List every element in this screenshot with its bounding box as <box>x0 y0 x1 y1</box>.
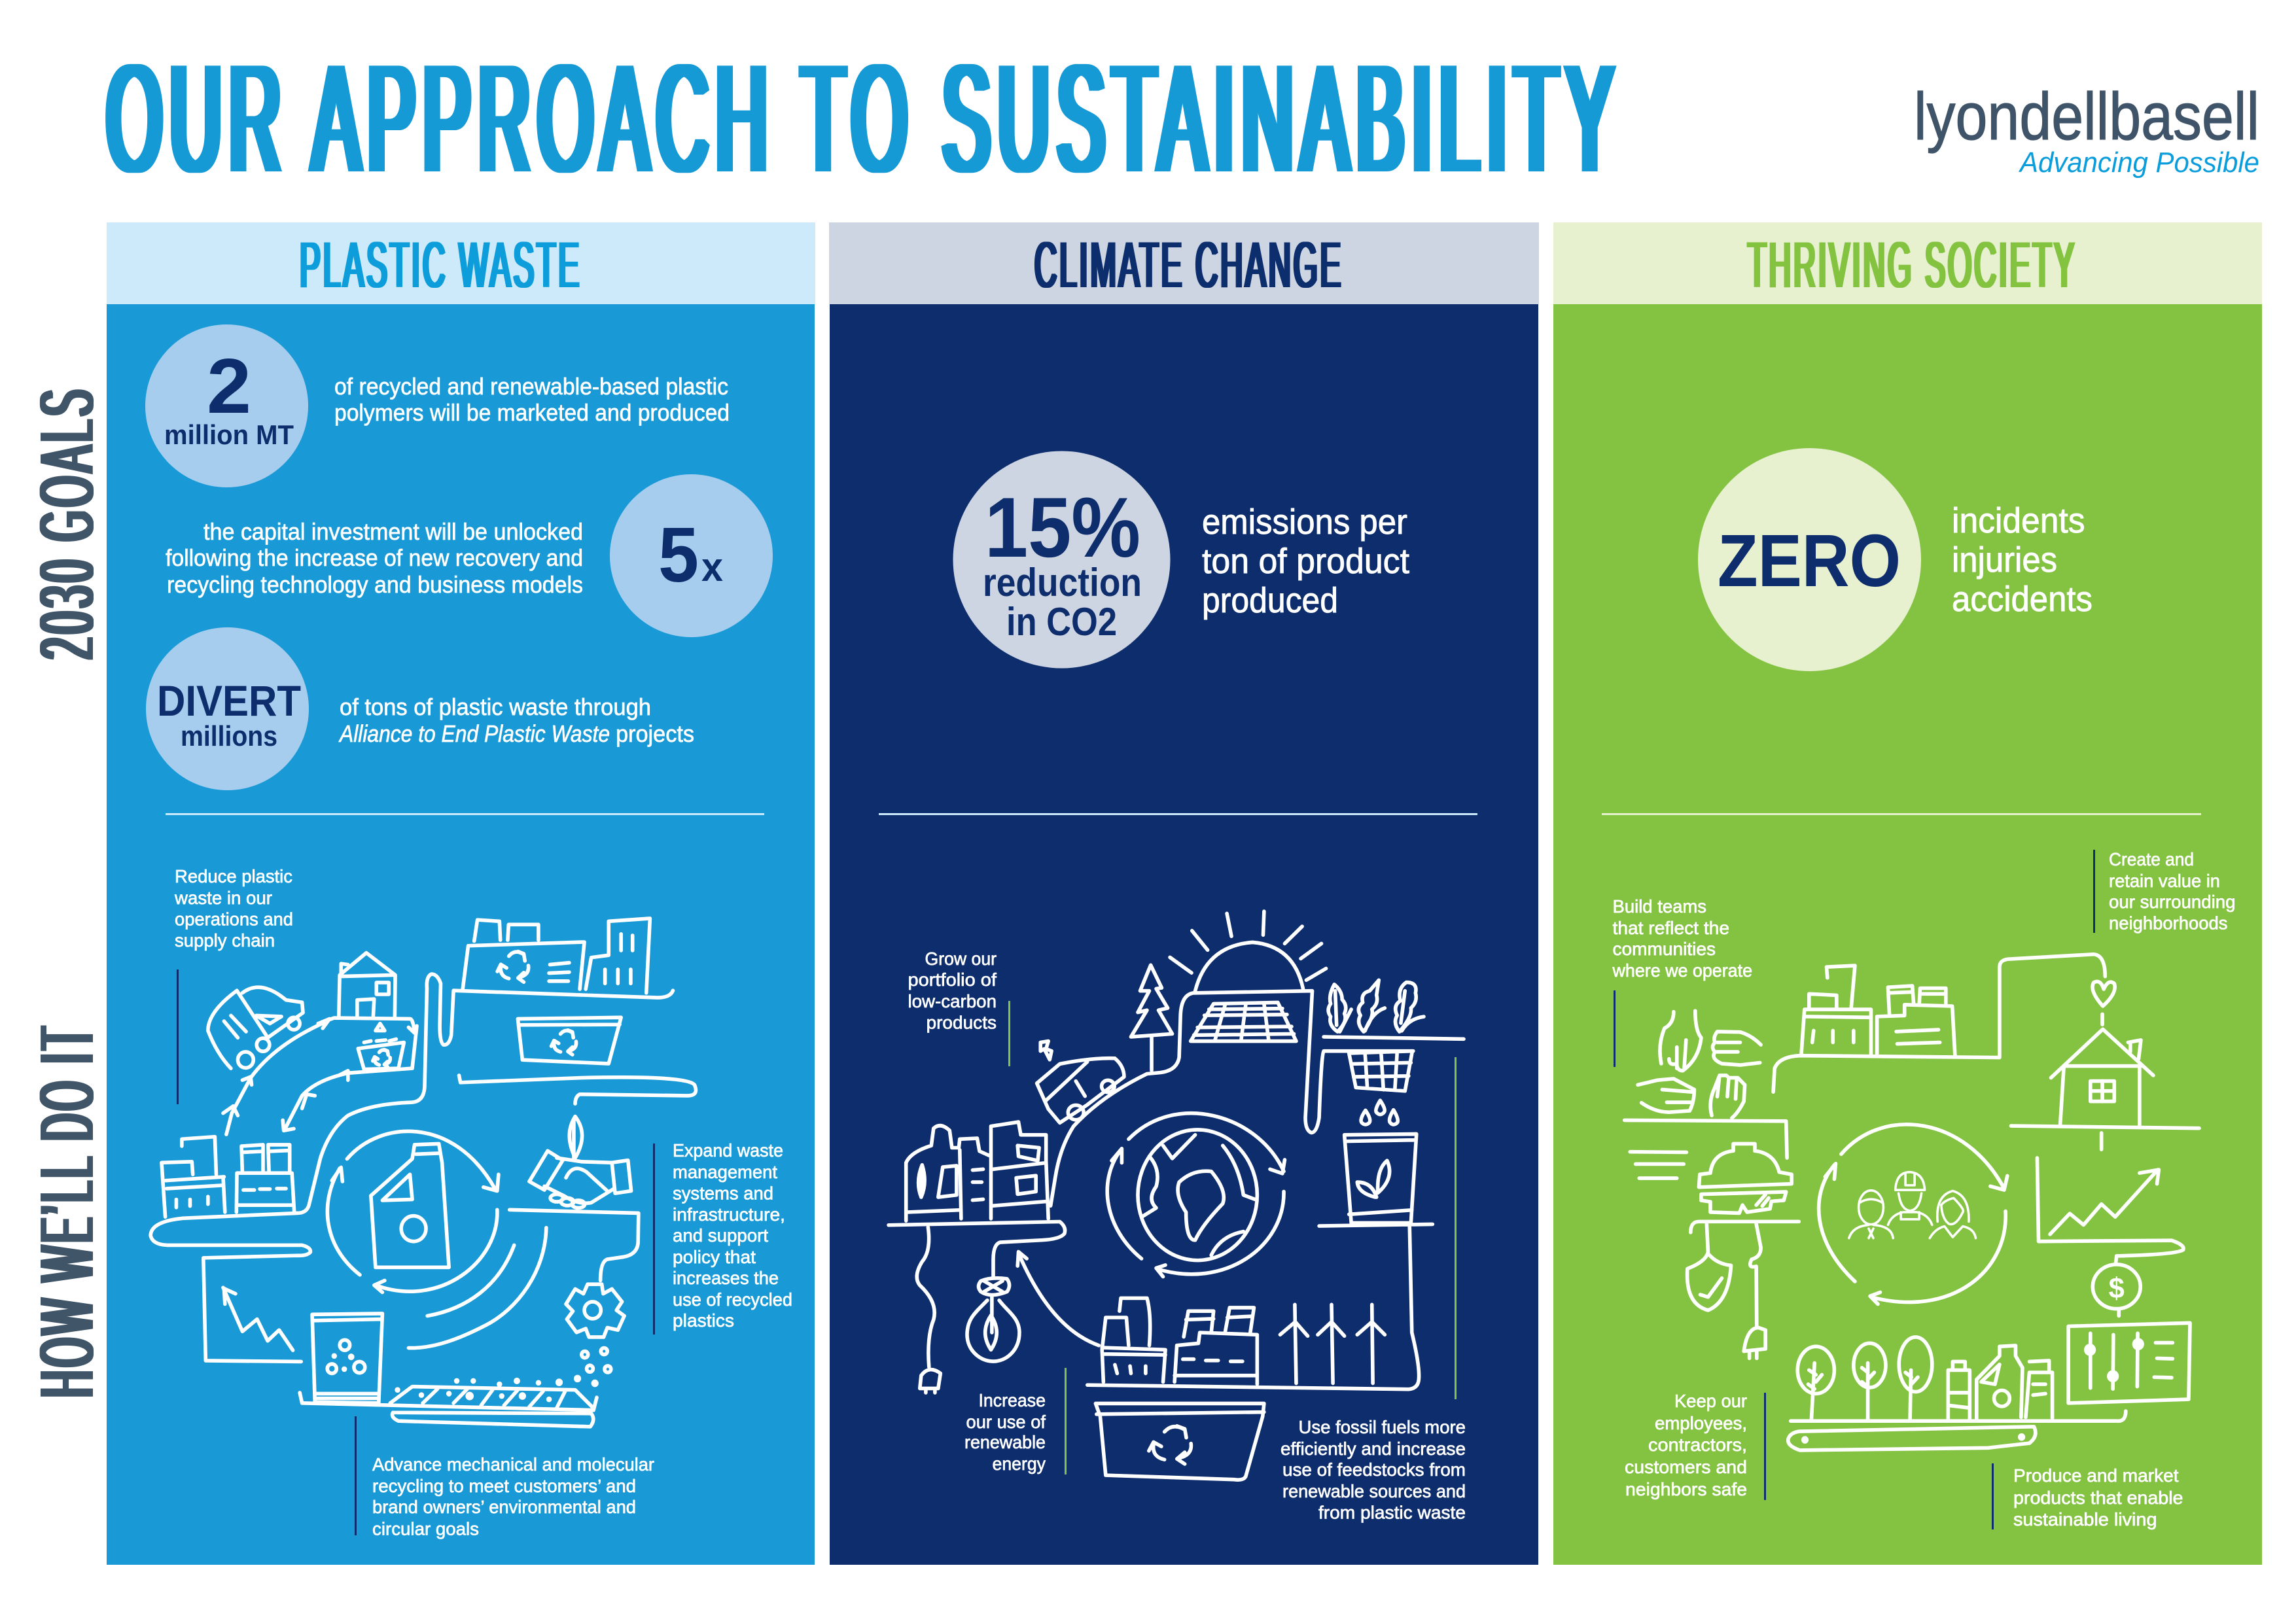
text: build teams <box>1612 896 1752 1067</box>
text: fossil fuels and feedstocks: Use fossil fuels more <box>1298 1417 1466 1437</box>
text: grow low-carbon products: Grow our <box>925 949 997 969</box>
icon: dollar coin: $ <box>2109 1272 2125 1304</box>
icon: left factory <box>162 1137 225 1217</box>
arrow: factory to products <box>1017 1251 1099 1346</box>
goal: 2 million MT: million MT <box>164 419 294 450</box>
text: expand waste management: Expand waste <box>673 1140 783 1161</box>
icon: recycling building <box>463 920 584 989</box>
logo: lyondellbasell <box>1914 79 2259 179</box>
text: expand waste management: plastics <box>673 1310 734 1331</box>
text: renewable energy <box>964 1368 1067 1475</box>
text: HOW WE’LL DO IT <box>24 1023 109 1397</box>
goal: 2 million MT <box>145 324 730 487</box>
panel body: thriving society <box>1553 304 2262 1565</box>
icon: small recycling bin <box>358 1024 404 1070</box>
goal: 15% reduction: 15% <box>985 480 1140 575</box>
goal: 5x capital investment: 5 <box>658 512 699 599</box>
panel header: thriving society <box>1553 222 2262 304</box>
goal: divert millions <box>146 627 694 790</box>
goal: 2 million MT: 2 <box>207 343 251 430</box>
text: produce and market: Produce and market <box>2013 1465 2179 1486</box>
goal: divert millions: DIVERT <box>157 676 301 725</box>
path: main loop <box>1051 991 1464 1206</box>
goal: divert millions: projects <box>616 720 694 747</box>
icon: basket <box>1349 1051 1412 1091</box>
icon: second factory <box>1174 1308 1257 1384</box>
text: grow low-carbon products: products <box>927 1013 997 1032</box>
text: build teams: Build teams <box>1612 896 1706 916</box>
panel: climate change <box>829 222 1539 1565</box>
text: reduce plastic waste <box>174 866 293 1104</box>
panel header: climate change: CLIMATE CHANGE <box>1034 228 1343 301</box>
goal: 15% reduction: produced <box>1202 581 1338 620</box>
icon: cycle arrows <box>1107 1113 1284 1277</box>
path: house shelf <box>2011 1126 2199 1149</box>
text: keep people safe: neighbors safe <box>1625 1479 1747 1499</box>
goal: zero incidents: accidents <box>1952 580 2093 619</box>
text: renewable energy: Increase <box>979 1390 1046 1410</box>
goal: 5x capital investment: the capital investment will be unlocked <box>203 518 583 545</box>
path: handshake shelf <box>510 1210 639 1280</box>
goal: zero incidents <box>1698 448 2093 671</box>
goal: 5x capital investment: x <box>701 545 723 590</box>
icon: plastic products <box>906 1122 1048 1221</box>
text: keep people safe <box>1625 1391 1766 1500</box>
icon: rising chart <box>2037 1158 2183 1264</box>
text: advance recycling: brand owners’ environmental and <box>372 1497 636 1517</box>
text: expand waste management: management <box>673 1162 777 1182</box>
panel body: climate change <box>830 304 1538 1565</box>
text: expand waste management: policy that <box>673 1247 756 1267</box>
icon: water drops <box>1361 1100 1398 1125</box>
text: reduce plastic waste: supply chain <box>175 930 275 951</box>
icon: power plug <box>917 1227 940 1393</box>
text: expand waste management: systems and <box>673 1183 773 1204</box>
text: fossil fuels and feedstocks: from plastic waste <box>1318 1502 1466 1523</box>
icon: plastic bottle <box>371 1143 449 1267</box>
goal: zero incidents: injuries <box>1952 540 2057 580</box>
text: renewable energy: our use of <box>966 1412 1046 1432</box>
text: advance recycling: circular goals <box>372 1519 479 1539</box>
goal: zero incidents: incidents <box>1952 501 2085 540</box>
text: grow low-carbon products <box>908 949 1010 1066</box>
icon: declining chart <box>223 1287 293 1350</box>
icon: factory <box>1801 966 1871 1055</box>
illustration: society circular economy <box>1625 954 2199 1450</box>
icon: bottles <box>1948 1346 2053 1420</box>
arrow: supply chain route <box>223 1018 417 1134</box>
icon: garbage truck <box>208 987 303 1068</box>
panel: thriving society <box>1553 222 2262 1565</box>
goal: divert millions: of tons of plastic waste through <box>340 693 651 720</box>
text: create and retain value: retain value in <box>2109 871 2220 891</box>
panel: plastic waste <box>107 222 815 1565</box>
icon: electric car <box>1037 1041 1124 1123</box>
text: fossil fuels and feedstocks: use of feedstocks from <box>1282 1459 1466 1480</box>
illustration: climate circular economy <box>889 911 1464 1480</box>
icon: light bulb <box>967 1278 1019 1361</box>
text: keep people safe: contractors, <box>1648 1435 1747 1455</box>
icon: conveyor belt <box>1788 1411 2126 1450</box>
icon: plug <box>1744 1224 1765 1358</box>
icon: handshake <box>529 1117 631 1208</box>
text: create and retain value <box>2093 849 2235 933</box>
path: hands shelf <box>1625 1120 1787 1178</box>
goal: 15% reduction: in CO2 <box>1006 600 1117 644</box>
icon: pellet bag <box>312 1314 382 1403</box>
icon: hands <box>1638 1011 1761 1118</box>
text: create and retain value: neighborhoods <box>2109 913 2227 933</box>
icon: cycle arrows <box>327 1131 499 1292</box>
path: swooshes <box>408 1228 546 1348</box>
icon: control panel <box>2068 1323 2190 1403</box>
text: keep people safe: employees, <box>1655 1413 1747 1433</box>
icon: trees <box>1797 1337 1932 1421</box>
goal: divert millions: millions <box>181 720 277 752</box>
text: fossil fuels and feedstocks: renewable sources and <box>1282 1481 1466 1501</box>
icon: house <box>2051 1029 2153 1126</box>
icon: solar panel <box>1191 1002 1296 1041</box>
text: produce and market: sustainable living <box>2013 1509 2157 1529</box>
panel header: plastic waste: PLASTIC WASTE <box>300 228 582 301</box>
text: build teams: communities <box>1612 939 1716 959</box>
text: create and retain value: Create and <box>2109 849 2194 869</box>
text: reduce plastic waste: waste in our <box>174 888 272 908</box>
path: right shelf <box>1087 1224 1432 1389</box>
text: reduce plastic waste: operations and <box>175 909 293 929</box>
icon: second factory <box>236 1145 294 1212</box>
goal: 15% reduction: emissions per <box>1202 502 1407 542</box>
text: create and retain value: our surrounding <box>2109 892 2235 912</box>
goal: 2 million MT: of recycled and renewable-based plastic <box>334 373 728 400</box>
icon: tree <box>1131 965 1173 1070</box>
text: fossil fuels and feedstocks <box>1280 1057 1466 1523</box>
icon: dollar coin <box>2093 1265 2140 1316</box>
icon: three people <box>1849 1172 1975 1238</box>
text: grow low-carbon products: low-carbon <box>908 991 997 1011</box>
icon: house <box>339 953 395 1017</box>
text: build teams: that reflect the <box>1612 918 1729 938</box>
goal: 15% reduction: ton of product <box>1202 542 1409 581</box>
text: keep people safe: customers and <box>1625 1457 1747 1477</box>
icon: sun <box>1170 911 1326 991</box>
icon: factory <box>1102 1298 1165 1382</box>
logo: lyondellbasell: Advancing Possible <box>2018 147 2259 179</box>
text: expand waste management: use of recycled <box>673 1289 792 1310</box>
path: main loop <box>150 974 673 1361</box>
goal: 15% reduction <box>953 451 1409 669</box>
icon: second factory <box>1877 986 1955 1055</box>
icon: hard hat and goggles <box>1699 1143 1792 1213</box>
panel header: plastic waste <box>107 222 815 304</box>
text: expand waste management: and support <box>673 1225 768 1246</box>
icon: bio cup <box>1345 1134 1417 1223</box>
icon: large recycling bin <box>1095 1403 1264 1480</box>
text: build teams: where we operate <box>1612 960 1752 981</box>
text: grow low-carbon products: portfolio of <box>908 969 997 990</box>
icon: safety shield <box>1687 1221 1799 1310</box>
icon: plants <box>1328 980 1424 1032</box>
goal: 2 million MT: polymers will be marketed and produced <box>334 399 730 426</box>
path: left shelf <box>889 1221 1065 1277</box>
icon: cycle arrows <box>1819 1125 2007 1304</box>
text: advance recycling: Advance mechanical and molecular <box>372 1454 654 1475</box>
goal: 15% reduction: reduction <box>983 561 1142 604</box>
text: expand waste management <box>653 1140 792 1335</box>
text: keep people safe: Keep our <box>1674 1391 1747 1411</box>
goal: 5x capital investment <box>166 474 773 637</box>
text: renewable energy: renewable <box>964 1432 1046 1452</box>
path: top route <box>1773 954 2105 1092</box>
icon: wind turbines <box>1280 1304 1385 1384</box>
icon: conveyor belt <box>300 1348 611 1427</box>
text: renewable energy: energy <box>992 1454 1046 1474</box>
icon: heart <box>2093 981 2115 1024</box>
text: produce and market: products that enable <box>2013 1488 2183 1508</box>
icon: globe <box>1138 1130 1257 1261</box>
illustration: plastic circular economy <box>150 918 696 1427</box>
text: advance recycling: recycling to meet customers’ and <box>372 1476 636 1496</box>
goal: divert millions: Alliance to End Plastic Waste <box>338 720 610 747</box>
path: lower shelf line <box>459 1075 696 1104</box>
text: produce and market <box>1992 1463 2183 1529</box>
icon: recycling bin <box>518 1017 621 1064</box>
panel body: plastic waste <box>107 304 815 1565</box>
goal: zero incidents: ZERO <box>1718 519 1901 602</box>
side label: 2030 goals: 2030 GOALS <box>24 386 109 659</box>
text: expand waste management: increases the <box>673 1268 779 1288</box>
text: expand waste management: infrastructure, <box>673 1204 785 1225</box>
text: advance recycling <box>355 1416 654 1539</box>
goal: 5x capital investment: recycling technology and business models <box>167 571 583 598</box>
goal: 5x capital investment: following the increase of new recovery and <box>166 544 583 571</box>
text: fossil fuels and feedstocks: efficiently and increase <box>1280 1439 1466 1459</box>
icon: office building <box>586 918 650 993</box>
text: reduce plastic waste: Reduce plastic <box>175 866 292 886</box>
icon: gear <box>566 1284 624 1337</box>
panel header: climate change <box>829 222 1539 304</box>
